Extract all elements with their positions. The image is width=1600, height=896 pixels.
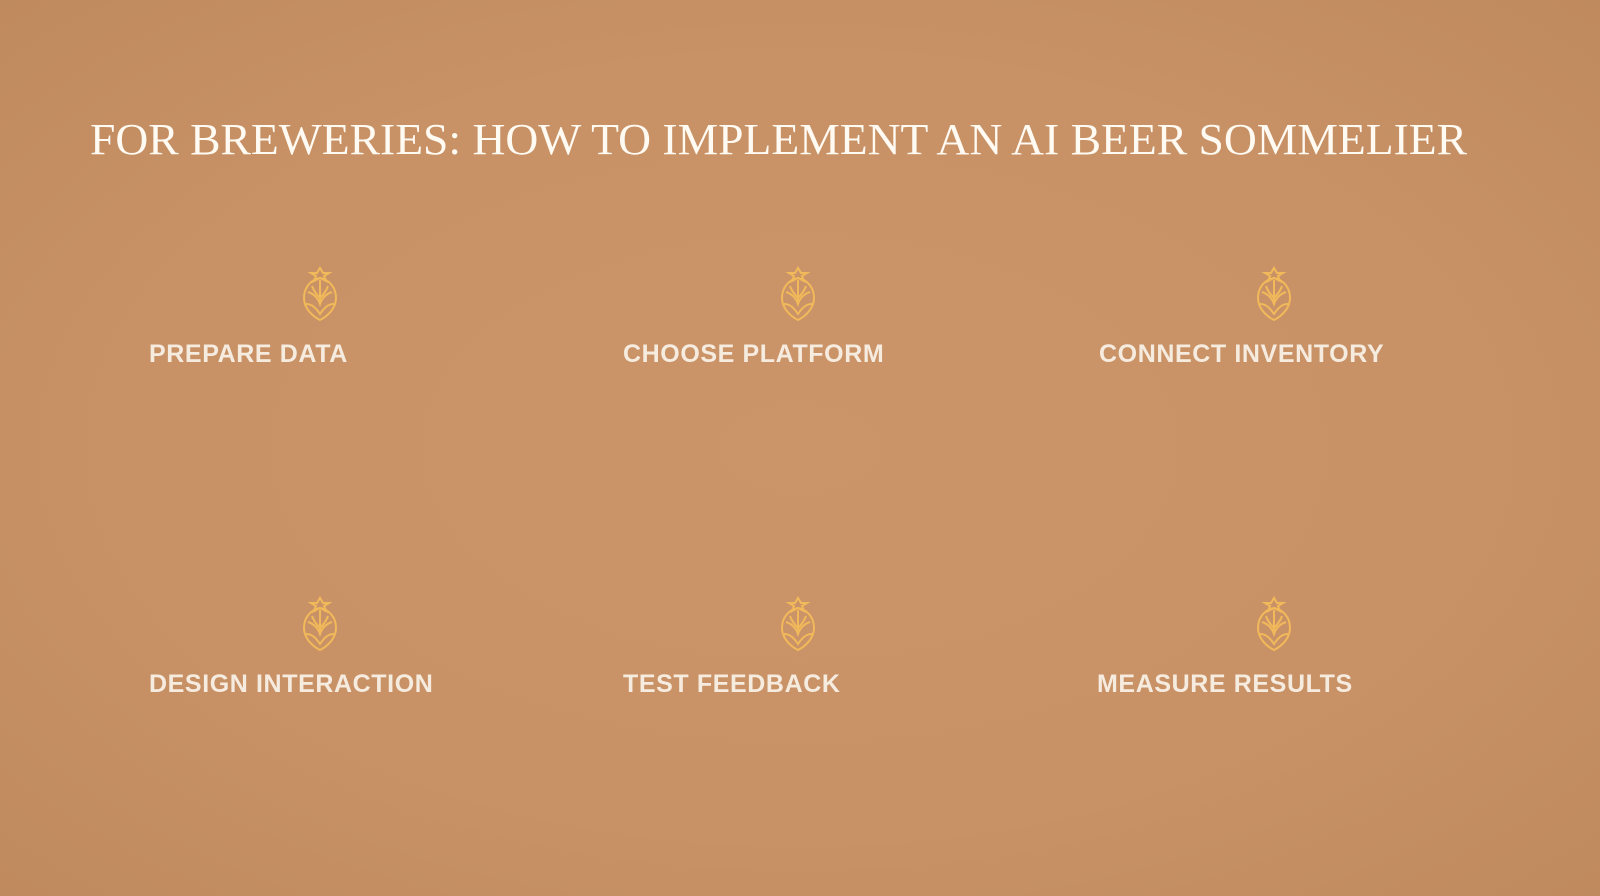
icon: hop 5 [781,596,815,651]
heading: connect inventory: CONNECT INVENTORY [1099,340,1384,368]
icon: hop 3 [1257,266,1291,321]
heading: prepare data: PREPARE DATA [149,340,348,368]
icon: hop 1 [303,266,337,321]
icon: hop 4 [303,596,337,651]
heading: choose platform: CHOOSE PLATFORM [623,340,884,368]
icon: hop 2 [781,266,815,321]
heading: measure results: MEASURE RESULTS [1097,670,1353,698]
heading: design interaction: DESIGN INTERACTION [149,670,433,698]
icon: hop 6 [1257,596,1291,651]
heading: test feedback: TEST FEEDBACK [623,670,841,698]
title: FOR BREWERIES: HOW TO IMPLEMENT AN AI BEER SOMMELIER [90,115,1468,164]
